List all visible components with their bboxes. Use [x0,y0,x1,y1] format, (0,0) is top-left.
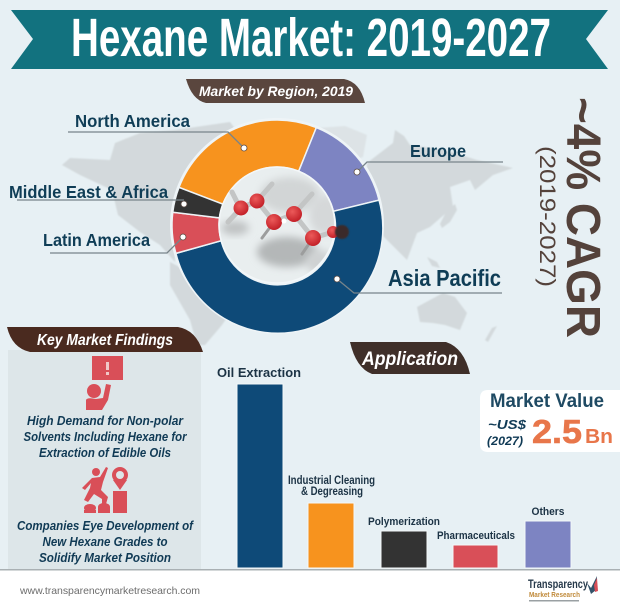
segment: Latin America [172,212,221,253]
bar: Others [525,506,571,568]
bar: Polymerization [368,516,440,568]
logo: Transparency Market Research: Market Research [529,590,580,599]
bar: Others: Others [532,506,564,518]
callout: market value: Bn [585,426,613,448]
panel: key market findings [7,327,203,569]
bar: Industrial Cleaning & Degreasing [288,475,375,568]
bar chart: application [217,365,571,568]
CAGR callout [535,97,609,338]
CAGR period: (2019-2027) [535,146,560,287]
heading: application [350,342,470,374]
label: Europe: Europe [410,141,466,161]
icon: person holding alert sign [86,356,123,410]
text: finding one [24,414,188,460]
heading: market by region [186,79,365,103]
text: finding one: Solvents Including Hexane for [24,430,188,444]
bar: Industrial Cleaning & Degreasing: Industrial Cleaning [288,475,375,487]
world map background [62,122,513,345]
label: North America: North America [75,111,190,131]
segment: Asia Pacific [176,200,383,333]
website url: www.transparencymarketresearch.com [19,585,200,597]
donut chart: market by region [170,118,384,333]
callout: market value: Market Value [490,391,604,412]
CAGR callout: ~4% CAGR [556,97,609,338]
text: finding two: Companies Eye Development of [17,519,195,533]
sphere: atoms [234,194,339,246]
text: finding one: Extraction of Edible Oils [39,446,171,460]
footer [0,569,620,607]
bar: Polymerization: Polymerization [368,516,440,528]
heading: key market findings [7,327,203,352]
bar: Oil Extraction: Oil Extraction [217,365,301,380]
title banner [11,8,608,69]
segment: Middle East & Africa [173,187,223,218]
bar: Industrial Cleaning & Degreasing: & Degreasing [301,486,363,498]
leader lines and dots [17,132,503,293]
label: Middle East & Africa: Middle East & Africa [9,182,168,202]
icon: person climbing to target [82,467,128,513]
callout: market value [480,390,620,452]
logo: Transparency Market Research [528,576,598,602]
molecule globe [219,167,349,283]
logo: Transparency Market Research: Transparency [528,579,588,591]
text: finding two: Solidify Market Position [39,551,171,565]
bar: Oil Extraction [217,365,301,568]
label: Latin America: Latin America [43,230,150,250]
callout: market value: 2.5 [532,413,582,450]
callout: market value: ~US$ [488,417,527,432]
label: Asia Pacific: Asia Pacific [388,265,501,291]
bar: Pharmaceuticals [437,530,515,568]
callout: market value: (2027) [487,434,523,448]
segment: North America [179,120,316,204]
heading: market by region: Market by Region, 2019 [199,83,353,99]
heading: application: Application [361,349,458,370]
text: finding one: High Demand for Non-polar [27,414,184,428]
text: finding two: New Hexane Grades to [42,535,168,549]
segment: Europe [299,128,379,211]
heading: key market findings: Key Market Findings [37,332,173,349]
text: finding two [17,519,195,565]
bar: Pharmaceuticals: Pharmaceuticals [437,530,515,542]
